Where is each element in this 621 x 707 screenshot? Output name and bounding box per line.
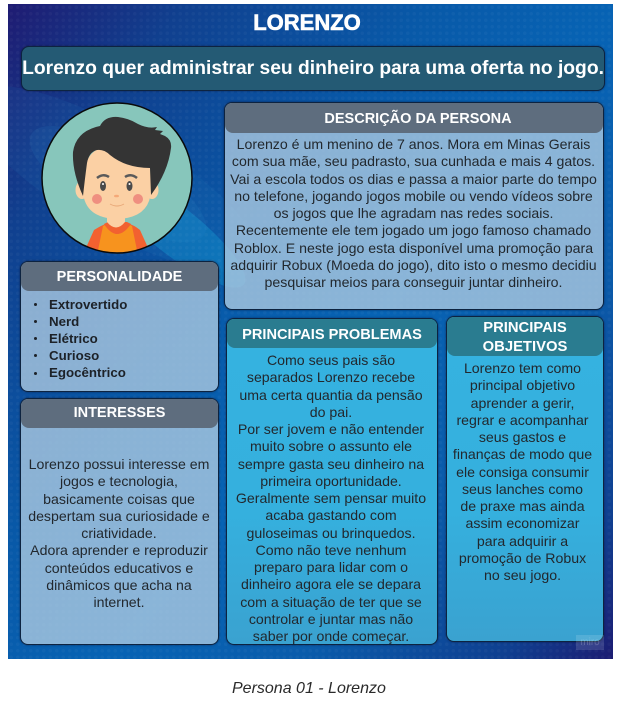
text: problemas: Geralmente sem pensar muito bbox=[236, 490, 426, 506]
text: descrição bbox=[230, 136, 597, 290]
watermark: miro bbox=[576, 635, 604, 650]
text: interesses: internet. bbox=[93, 594, 145, 610]
text: objetivos: de praxe mas ainda bbox=[460, 498, 585, 514]
text: descrição: Recentemente ele tem jogado um jogo famoso chamado bbox=[236, 222, 591, 238]
text: objetivos bbox=[453, 360, 592, 583]
heading: objetivos: PRINCIPAIS bbox=[483, 320, 567, 336]
text: descrição: Vai a escola todos os dias e passa a maior parte do tempo bbox=[230, 170, 597, 186]
text: interesses: despertam sua curiosidade e bbox=[28, 508, 210, 524]
list: traits: Extrovertido bbox=[49, 296, 127, 312]
text: problemas: separados Lorenzo recebe bbox=[247, 369, 415, 385]
text: descrição: Lorenzo é um menino de 7 anos. Mora em Minas Gerais bbox=[237, 136, 590, 152]
text: problemas: preparo para lidar com o bbox=[254, 559, 408, 575]
text: interesses: Lorenzo possui interesse em bbox=[29, 456, 209, 472]
text: descrição: adquirir Robux (Moeda do jogo), dito isto o mesmo decidiu bbox=[230, 257, 597, 273]
text: interesses: Adora aprender e reproduzir bbox=[30, 542, 208, 558]
heading: problemas bbox=[227, 319, 437, 348]
text: objetivos: seus lanches como bbox=[462, 481, 583, 497]
heading: personalidade bbox=[21, 262, 218, 291]
text: objetivos: Lorenzo tem como bbox=[464, 360, 581, 376]
text: problemas: uma certa quantia da pensão bbox=[239, 386, 423, 402]
heading: descrição: DESCRIÇÃO DA PERSONA bbox=[324, 111, 512, 127]
text: problemas: acaba gastando com bbox=[265, 507, 397, 523]
text: objetivos: principal objetivo bbox=[470, 377, 575, 393]
text: interesses: basicamente coisas que bbox=[43, 490, 195, 506]
heading: descrição bbox=[225, 103, 603, 133]
panel: principais problemas bbox=[226, 318, 438, 645]
panel: principais objetivos bbox=[446, 316, 604, 642]
heading: problemas: PRINCIPAIS PROBLEMAS bbox=[242, 327, 422, 343]
text: objetivos: ele consiga consumir bbox=[456, 464, 589, 480]
text: interesses: jogos e tecnologia, bbox=[60, 473, 178, 489]
text: objetivos: seus gastos e bbox=[479, 429, 566, 445]
watermark: miro: miro bbox=[580, 637, 600, 648]
text: problemas: dinheiro agora ele se depara bbox=[241, 576, 421, 592]
text: problemas: saber por onde começar. bbox=[253, 628, 409, 644]
list: traits: Elétrico bbox=[49, 331, 98, 346]
list: traits: Nerd bbox=[49, 314, 79, 329]
title: LORENZO bbox=[253, 10, 361, 35]
banner: goal statement: Lorenzo quer administrar seu dinheiro para uma oferta no jogo. bbox=[22, 58, 604, 79]
text: problemas bbox=[236, 352, 426, 644]
heading: objetivos bbox=[447, 317, 603, 356]
list: traits bbox=[34, 296, 127, 380]
text: objetivos: aprender a gerir, bbox=[471, 394, 574, 410]
text: descrição: no telefone, jogando jogos mobile ou vendo vídeos sobre bbox=[234, 188, 593, 204]
text: problemas: muito sobre o assunto ele bbox=[250, 438, 412, 454]
text: problemas: do pai. bbox=[310, 404, 352, 420]
text: objetivos: finanças de modo que bbox=[453, 446, 592, 462]
text: interesses: dinâmicos que acha na bbox=[46, 577, 192, 593]
text: descrição: Roblox. E neste jogo esta disponível uma promoção para bbox=[234, 240, 593, 256]
text: problemas: primeira oportunidade. bbox=[260, 473, 402, 489]
panel: personalidade bbox=[20, 261, 219, 392]
list: traits: Egocêntrico bbox=[49, 365, 126, 380]
text: interesses: conteúdos educativos e bbox=[45, 560, 193, 576]
text: problemas: Como seus pais são bbox=[267, 352, 395, 368]
text: objetivos: para adquirir a bbox=[477, 532, 568, 548]
heading: objetivos: OBJETIVOS bbox=[483, 339, 567, 355]
panel: interesses bbox=[20, 398, 219, 645]
caption: Persona 01 - Lorenzo bbox=[232, 680, 386, 697]
text: objetivos: assim economizar bbox=[466, 515, 579, 531]
heading: personalidade: PERSONALIDADE bbox=[57, 269, 182, 285]
text: problemas: controlar e juntar mas não bbox=[249, 611, 413, 627]
text: objetivos: promoção de Robux bbox=[459, 550, 586, 566]
banner: goal statement bbox=[21, 46, 605, 90]
text: problemas: sempre gasta seu dinheiro na bbox=[238, 456, 424, 472]
text: problemas: Como não teve nenhum bbox=[256, 542, 406, 558]
text: problemas: com a situação de ter que se bbox=[240, 594, 422, 610]
text: descrição: com sua mãe, seu padrasto, sua cunhada e mais 4 gatos. bbox=[232, 153, 595, 169]
icon: boy avatar bbox=[41, 102, 193, 254]
text: descrição: os jogos que lhe agradam nas redes sociais. bbox=[274, 205, 553, 221]
panel: descrição da persona bbox=[224, 102, 604, 310]
list: traits: Curioso bbox=[49, 348, 99, 363]
heading: interesses bbox=[21, 399, 218, 428]
text: objetivos: regrar e acompanhar bbox=[456, 412, 589, 428]
text: interesses bbox=[28, 456, 210, 610]
text: problemas: guloseimas ou brinquedos. bbox=[246, 524, 416, 540]
text: descrição: pesquisar meios para conseguir juntar dinheiro. bbox=[265, 274, 562, 290]
text: objetivos: no seu jogo. bbox=[484, 567, 561, 583]
heading: interesses: INTERESSES bbox=[74, 405, 165, 421]
text: problemas: Por ser jovem e não entender bbox=[238, 421, 424, 437]
text: interesses: criatividade. bbox=[81, 525, 157, 541]
